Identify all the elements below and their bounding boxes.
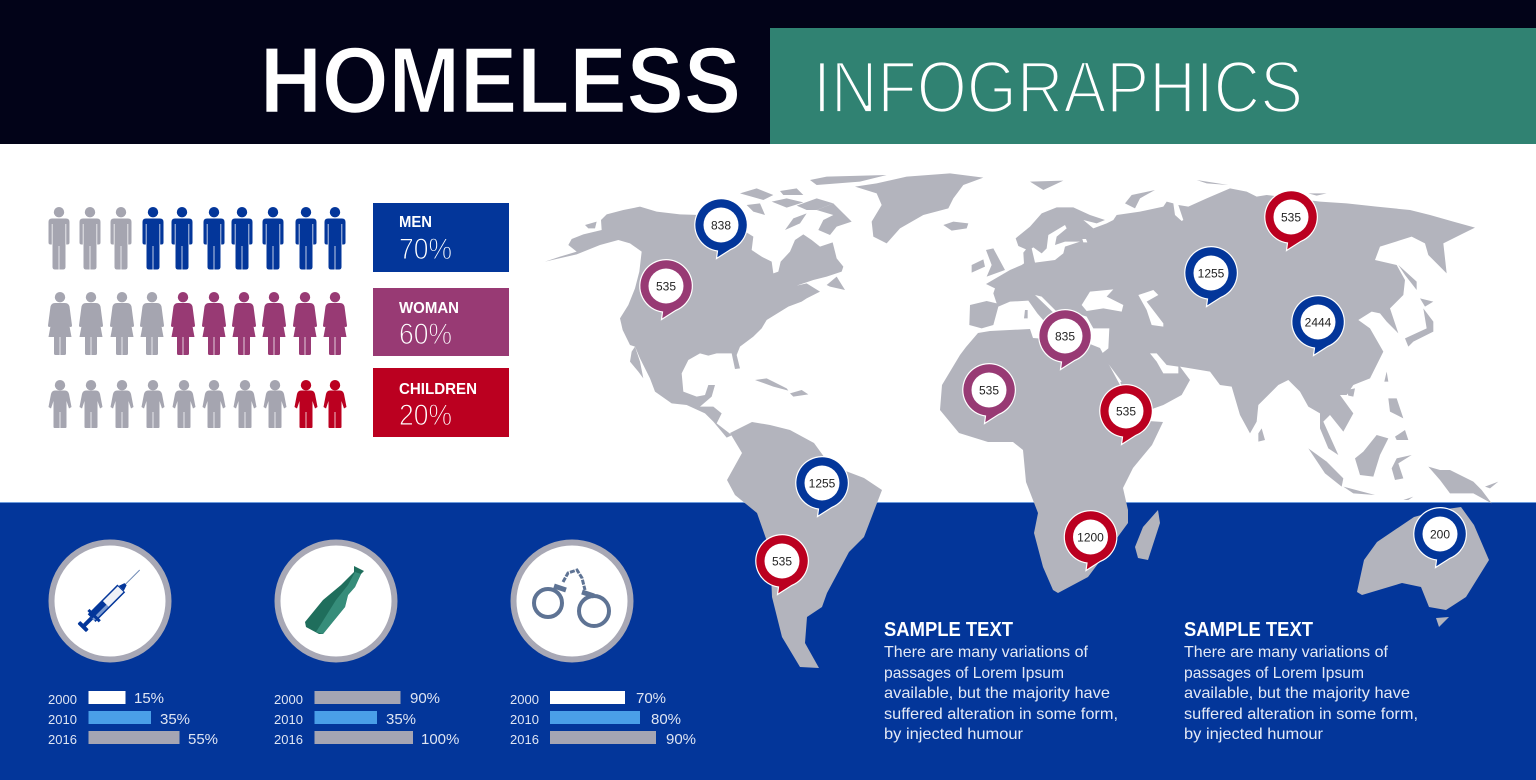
map pin: 2444 [1292, 296, 1344, 356]
map pin: 838 [695, 199, 747, 258]
map pin: 535 russia: 535 [1281, 210, 1301, 224]
bar chart: handcuffs: 2016 [510, 732, 539, 747]
panel: men pictogram row [48, 207, 346, 270]
map pin: 200: 200 [1430, 528, 1450, 542]
bar chart: syringe: 2016 [48, 732, 77, 747]
icon: syringe [52, 542, 168, 660]
map: tasmania [1436, 617, 1449, 627]
panel: woman pictogram row [48, 292, 347, 355]
card: woman 60%: WOMAN [399, 300, 459, 317]
text block: sample text 2: SAMPLE TEXT [1184, 619, 1313, 641]
bar chart: syringe: 55% [188, 731, 218, 748]
inland seas [1032, 225, 1178, 383]
map: australia [1357, 507, 1489, 610]
card: children 20% [373, 368, 509, 437]
header band [0, 0, 1536, 144]
map pin: 535 south america: 535 [772, 554, 792, 568]
text block: sample text 2: by injected humour [1184, 726, 1324, 743]
blue lower band [0, 502, 1536, 780]
title: homeless: HOMELESS [260, 28, 741, 133]
bar chart: bottle: 2010 [274, 712, 303, 727]
text block: sample text 2: passages of Lorem Ipsum [1184, 665, 1364, 682]
map pin: 1200 [1064, 511, 1117, 570]
map pin: 1255 asia: 1255 [1198, 266, 1225, 280]
icon: handcuffs [514, 542, 630, 660]
map: madagascar [1135, 510, 1160, 560]
text block: sample text 2: suffered alteration in some form, [1184, 706, 1418, 723]
map pin: 535 west africa [963, 364, 1015, 424]
card: men 70% [373, 203, 509, 272]
bar chart: syringe: 2000 [48, 692, 77, 707]
map pin: 200 [1414, 508, 1466, 568]
map pin: 535 east africa [1100, 385, 1152, 444]
map: eurasia [969, 180, 1498, 503]
text block: sample text 2: available, but the majority have [1184, 685, 1410, 702]
map pin: 535 west africa: 535 [979, 384, 999, 398]
bar chart: syringe: 35% [160, 711, 190, 728]
bar chart: bottle: 35% [386, 711, 416, 728]
card: children 20%: 20% [399, 399, 452, 432]
card: men 70%: MEN [399, 214, 432, 231]
text block: sample text 1: SAMPLE TEXT [884, 619, 1013, 641]
map: north america and greenland [545, 173, 1005, 438]
bar chart: handcuffs: 70% [636, 690, 666, 707]
text block: sample text 2: There are many variations of [1184, 644, 1389, 661]
map pin: 835 [1039, 310, 1091, 370]
title: infographics: INFOGRAPHICS [813, 45, 1303, 128]
map pin: 1255 south america: 1255 [809, 476, 836, 490]
text block: sample text 1: passages of Lorem Ipsum [884, 665, 1064, 682]
bar chart: bottle: 2000 [274, 692, 303, 707]
text block: sample text 1: There are many variations of [884, 644, 1089, 661]
text block: sample text 2 [1184, 619, 1418, 743]
card: woman 60% [373, 288, 509, 356]
bar chart: handcuffs: 90% [666, 731, 696, 748]
bar chart: bottle: 2016 [274, 732, 303, 747]
map pin: 535 east africa: 535 [1116, 404, 1136, 418]
bar chart: syringe: 15% [134, 690, 164, 707]
card: men 70%: 70% [399, 233, 452, 266]
world map [545, 173, 1498, 668]
text block: sample text 1: by injected humour [884, 726, 1024, 743]
icon: bottle [278, 542, 394, 660]
card: children 20%: CHILDREN [399, 381, 477, 398]
map pin: 535 south america [756, 535, 808, 594]
map pin: 535 north america [640, 260, 692, 320]
map pin: 2444: 2444 [1305, 316, 1332, 330]
bar chart: handcuffs: 80% [651, 711, 681, 728]
bar chart: bottle: 100% [421, 731, 459, 748]
card: woman 60%: 60% [399, 318, 452, 351]
map pin: 835: 835 [1055, 330, 1075, 344]
bar chart: syringe [48, 690, 218, 748]
text block: sample text 1 [884, 619, 1118, 743]
map pin: 838: 838 [711, 218, 731, 232]
bar chart: bottle: 90% [410, 690, 440, 707]
bar chart: handcuffs [510, 690, 696, 748]
map pin: 535 russia [1265, 191, 1317, 250]
map: africa [940, 329, 1163, 593]
map pin: 1255 asia [1185, 247, 1237, 306]
map pin: 1200: 1200 [1077, 530, 1104, 544]
text block: sample text 1: available, but the majority have [884, 685, 1110, 702]
panel: children pictogram row [48, 380, 346, 428]
map pin: 535 north america: 535 [656, 280, 676, 294]
bar chart: handcuffs: 2010 [510, 712, 539, 727]
bar chart: syringe: 2010 [48, 712, 77, 727]
map pin: 1255 south america [796, 457, 848, 516]
text block: sample text 1: suffered alteration in some form, [884, 706, 1118, 723]
map: south america [727, 422, 882, 668]
bar chart: handcuffs: 2000 [510, 692, 539, 707]
bar chart: bottle [274, 690, 459, 748]
